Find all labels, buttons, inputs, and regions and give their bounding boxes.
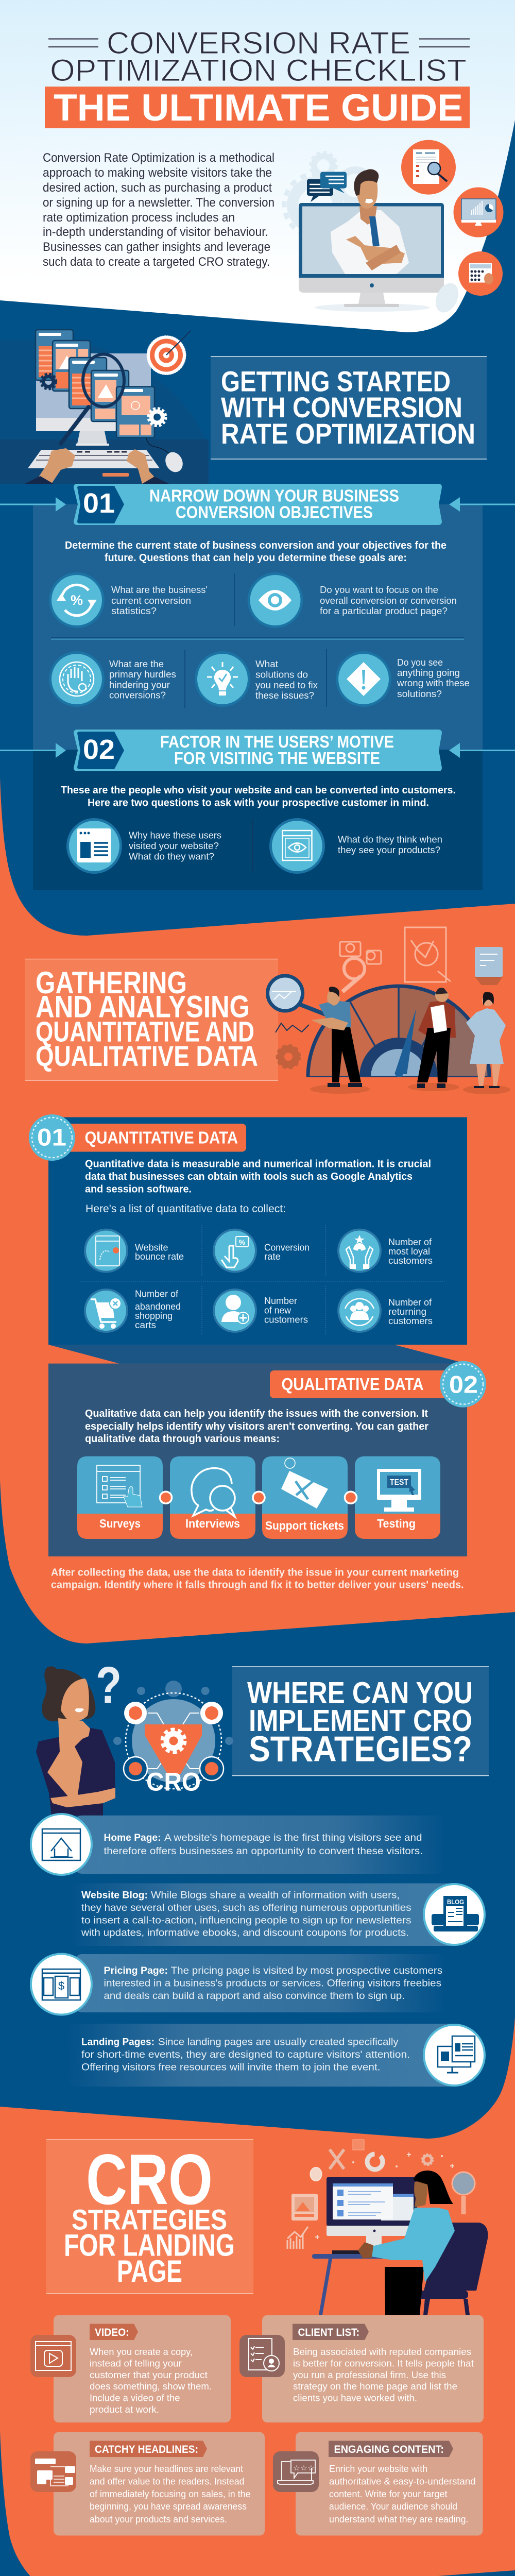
number badge: 01 — [37, 1123, 66, 1151]
CRO label: CRO — [146, 1767, 201, 1796]
question: why visited: Why have these users — [129, 830, 221, 841]
disc — [132, 1699, 215, 1783]
title line 2: OPTIMIZATION CHECKLIST — [50, 53, 467, 88]
fold connecting panels — [48, 1345, 458, 1364]
question: focus: for a particular product page? — [320, 605, 448, 616]
card: support tickets: Support tickets — [265, 1519, 344, 1532]
step 01 lead text: future. Questions that can help you determine these goals are: — [105, 552, 407, 564]
icon: home window — [42, 1829, 80, 1860]
title decorative lines — [48, 39, 470, 47]
card: interviews — [170, 1456, 255, 1539]
hero illustration: businessman in monitor — [284, 140, 504, 316]
metric: new customers — [213, 1289, 308, 1333]
card: interviews: Interviews — [185, 1517, 240, 1530]
divider — [234, 573, 235, 626]
card: engaging content: content. Write for your target — [329, 2489, 448, 2499]
banner text: THE ULTIMATE GUIDE — [54, 87, 463, 129]
panel: quantitative data: data that businesses can obtain with tools such as Google Analytics — [85, 1171, 413, 1182]
header text: WHERE CAN YOU — [247, 1676, 473, 1710]
floating icons — [310, 2140, 454, 2239]
icon: eye window — [282, 831, 312, 860]
panel: quantitative data: QUANTITATIVE DATA — [84, 1128, 238, 1147]
metric: loyal customers: most loyal — [388, 1246, 430, 1257]
question: why visited: What do they want? — [129, 851, 214, 862]
metric: loyal customers: customers — [388, 1255, 433, 1266]
card: video: When you create a copy, — [90, 2347, 193, 2357]
question: hurdles: hindering your — [109, 679, 170, 690]
header panel: where can you implement: STRATEGIES? — [249, 1728, 472, 1769]
icon: warning diamond — [347, 662, 381, 696]
panel: qualitative data — [48, 1361, 486, 1556]
card: video — [30, 2315, 231, 2422]
card: testing — [355, 1456, 440, 1539]
icon: browser page — [77, 828, 111, 862]
intro paragraph: desired action, such as purchasing a product — [43, 181, 272, 195]
question: conversion statistics: current conversion — [111, 595, 191, 606]
ribbon: step 02: FACTOR IN THE USERS’ MOTIVE — [160, 732, 394, 751]
orange band: gathering data — [0, 777, 515, 1643]
metric: abandoned carts — [84, 1289, 181, 1333]
icon: analytics monitor — [453, 188, 504, 237]
illustration: analysts and gauge — [268, 927, 510, 1094]
row: website blog: with updates, informative ebooks, and discount coupons for products. — [81, 1928, 409, 1938]
icon: review laptop — [278, 2460, 315, 2484]
card: video: product at work. — [90, 2404, 159, 2415]
card: video: Include a video of the — [90, 2393, 180, 2403]
desk — [0, 439, 209, 484]
torso — [36, 1727, 115, 1816]
question: solutions: you need to fix — [255, 680, 318, 690]
small window 4 — [91, 370, 129, 421]
speech card — [475, 947, 503, 985]
question: hurdles: primary hurdles — [109, 669, 176, 680]
card: catchy headlines — [30, 2432, 265, 2536]
row: website blog: While Blogs share a wealth of information with users, — [151, 1890, 400, 1901]
metric: returning customers: returning — [388, 1306, 426, 1317]
ribbon: step 01 — [0, 484, 515, 525]
card: video: does something, show them. — [90, 2381, 212, 2392]
icon: blog — [432, 1896, 479, 1931]
header panel: gathering and analysing: AND ANALYSING — [36, 989, 250, 1024]
horizontal divider — [51, 637, 464, 638]
card: client list: CLIENT LIST: — [298, 2327, 359, 2338]
card: testing: Testing — [377, 1517, 416, 1530]
speech bubbles — [307, 172, 347, 202]
question: what they think — [269, 818, 442, 874]
image card — [291, 2194, 318, 2221]
row: home page: Home Page: — [104, 1833, 161, 1843]
icon: pricing — [42, 1969, 80, 2000]
header panel: where can you implement: IMPLEMENT CRO — [249, 1704, 472, 1738]
analyst three — [466, 992, 506, 1088]
metric: abandoned carts: shopping — [135, 1310, 173, 1321]
monitor — [327, 2177, 417, 2252]
header text: GETTING STARTED — [221, 365, 451, 398]
card: client list — [239, 2315, 484, 2422]
magnifier — [452, 2172, 475, 2214]
question: solutions: these issues? — [255, 690, 314, 701]
question: focus: Do you want to focus on the — [320, 584, 438, 595]
person — [358, 2171, 455, 2315]
step 01 lead text — [65, 540, 447, 564]
step 01 lead text: Determine the current state of business conversion and your objectives for the — [65, 540, 447, 551]
question: hurdles: conversions? — [109, 690, 166, 701]
target — [147, 331, 191, 375]
ribbon: step 02 — [0, 730, 515, 771]
icon: light bulb — [207, 662, 238, 696]
metric: bounce rate — [84, 1229, 184, 1273]
face — [61, 1679, 89, 1721]
intro paragraph: Businesses can gather insights and leverage — [43, 240, 270, 254]
card: video: customer that your product — [90, 2370, 208, 2380]
orange heading pill — [270, 1370, 450, 1398]
closing note for data section: campaign. Identify where it falls through and fix it to better deliver your users' needs. — [51, 1580, 464, 1591]
intro paragraph: such data to create a targeted CRO strategy. — [43, 255, 270, 269]
title block — [45, 26, 470, 129]
card: catchy headlines: CATCHY HEADLINES: — [95, 2444, 198, 2455]
gauge — [307, 986, 490, 1077]
header panel: getting started — [211, 357, 487, 459]
header panel: gathering and analysing: QUALITATIVE DATA — [36, 1040, 258, 1072]
row: landing pages: Since landing pages are usually created specifically — [158, 2037, 399, 2048]
metric: new customers: Number — [264, 1295, 297, 1306]
metric: abandoned carts: abandoned — [135, 1301, 181, 1312]
illustration: woman at desk — [287, 2140, 488, 2315]
metric: returning customers — [337, 1289, 433, 1333]
card: surveys — [77, 1456, 163, 1539]
row: home page: therefore offers businesses an opportunity to convert these visitors. — [104, 1846, 423, 1857]
icon: client list — [249, 2338, 279, 2371]
panel: qualitative data: qualitative data through various means: — [85, 1433, 280, 1445]
row: home page — [31, 1814, 445, 1875]
question: what they think: What do they think when — [338, 834, 442, 845]
background gears — [284, 152, 371, 236]
pale blob — [431, 279, 463, 316]
row: home page: A website's homepage is the first thing visitors see and — [164, 1833, 422, 1843]
intro paragraph: rate optimization process includes an — [43, 211, 235, 225]
header text: GATHERING — [36, 965, 187, 1000]
question: going wrong — [336, 651, 470, 707]
card: testing: TEST — [390, 1478, 408, 1487]
description: Quantitative data is measurable and numerical information. It is crucial — [85, 1159, 431, 1170]
header panel: gathering and analysing — [25, 959, 278, 1080]
ribbon: step 02: FOR VISITING THE WEBSITE — [174, 749, 380, 768]
header panel: where can you implement — [232, 1667, 489, 1775]
intro paragraph: approach to making website visitors take the — [43, 166, 272, 180]
card: engaging content: ENGAGING CONTENT: — [334, 2444, 444, 2455]
card: video: instead of telling your — [90, 2359, 182, 2369]
row: pricing page — [31, 1954, 445, 2014]
card: surveys: Surveys — [99, 1517, 141, 1530]
card: engaging content: understand what they are reading. — [329, 2514, 469, 2524]
monitor — [36, 353, 151, 446]
metric: conversion rate: % — [239, 1238, 246, 1246]
number badge — [29, 1114, 75, 1161]
card: client list: strategy on the home page and list the — [293, 2381, 457, 2392]
icon: landing pages — [438, 2036, 475, 2073]
row: pricing page: $ — [58, 1979, 64, 1992]
analyst two — [417, 988, 456, 1088]
metric: new customers: customers — [264, 1314, 308, 1325]
hair — [42, 1666, 95, 1721]
magnifying glass — [61, 354, 124, 444]
intro paragraph: Conversion Rate Optimization is a methodical — [43, 151, 274, 165]
question: solutions: What — [255, 658, 278, 669]
metric: loyal customers — [337, 1229, 433, 1273]
header panel: CRO strategies: FOR LANDING — [64, 2228, 235, 2263]
ribbon: step 02: 02 — [83, 734, 115, 765]
icon: blog: BLOG — [447, 1898, 464, 1906]
neck and arm — [47, 1718, 90, 1798]
nodes — [124, 1702, 224, 1781]
divider — [252, 819, 253, 871]
orange title banner — [45, 87, 470, 128]
panel: step 01 body — [33, 504, 483, 750]
orange heading pill — [66, 1124, 246, 1152]
card: engaging content: audience. Your audience should — [329, 2501, 457, 2512]
question: conversion statistics: What are the business' — [111, 584, 208, 595]
card: engaging content: ☆☆☆ — [293, 2464, 315, 2472]
card: video: VIDEO: — [95, 2327, 129, 2338]
question: why visited — [66, 818, 221, 874]
row: pricing page: and deals can build a rapport and also convince them to sign up. — [104, 1991, 405, 2002]
analyst one — [312, 987, 362, 1087]
icon: percent cycle — [57, 585, 97, 616]
illustration: thinking woman — [36, 1666, 115, 1816]
ribbon: step 01: NARROW DOWN YOUR BUSINESS — [149, 486, 399, 505]
row: pricing page: The pricing page is visited by most prospective customers — [171, 1965, 442, 1976]
small window 3 — [69, 358, 107, 409]
intro paragraph — [43, 151, 274, 269]
question: going wrong: solutions? — [397, 688, 442, 699]
card: catchy headlines: Make sure your headlines are relevant — [90, 2464, 243, 2474]
card: support tickets — [262, 1456, 348, 1539]
small window 2 — [53, 341, 90, 391]
question: solutions — [195, 651, 318, 707]
closing note for data section — [51, 1567, 464, 1591]
floating icons — [340, 927, 451, 992]
ribbon: step 01: CONVERSION OBJECTIVES — [176, 503, 373, 522]
question: going wrong: anything going — [397, 667, 460, 678]
icon: video window — [36, 2342, 71, 2370]
grid dividers — [81, 1225, 446, 1335]
question: conversion statistics: statistics? — [111, 605, 157, 616]
question: going wrong: Do you see — [397, 657, 443, 668]
row: landing pages: for short-time events, they are designed to capture visitors' attention. — [81, 2049, 410, 2060]
metric: new customers: of new — [264, 1304, 291, 1315]
illustration: website windows on desktop — [0, 330, 209, 484]
row: website blog: they have several other uses, such as offering numerous opportunities — [81, 1903, 411, 1913]
card: engaging content: Enrich your website with — [329, 2464, 427, 2474]
header panel: CRO strategies: STRATEGIES — [72, 2204, 227, 2236]
row: pricing page: Pricing Page: — [104, 1965, 168, 1976]
row: website blog: Website Blog: — [81, 1890, 148, 1901]
card: catchy headlines: about your products and services. — [90, 2514, 227, 2524]
card: client list: Being associated with reputed companies — [293, 2347, 471, 2357]
row: landing pages: Offering visitors free resources will invite them to join the event. — [81, 2062, 380, 2073]
header panel: CRO strategies: PAGE — [117, 2254, 182, 2289]
small window 1 — [36, 330, 73, 380]
satellites — [113, 1681, 233, 1745]
divider — [185, 649, 327, 708]
metric: returning customers: customers — [388, 1315, 433, 1326]
row: landing pages: Landing Pages: — [81, 2037, 154, 2048]
intro paragraph: or signing up for a newsletter. The conversion — [43, 196, 274, 210]
metric: conversion rate — [213, 1229, 310, 1273]
row: pricing page: interested in a business's products or services. Offering visitors freebies — [104, 1978, 441, 1989]
connector dots — [160, 1492, 356, 1503]
card: catchy headlines: of immediately focusing on sales, in the — [90, 2489, 251, 2499]
decorative zigzag and gear — [276, 1023, 309, 1068]
growth chart — [287, 2227, 308, 2249]
icon: eye — [259, 590, 291, 611]
gears — [41, 374, 166, 426]
header panel: CRO strategies — [46, 2140, 253, 2294]
list intro: Here's a list of quantitative data to collect: — [85, 1203, 286, 1215]
panel: qualitative data: QUALITATIVE DATA — [281, 1375, 423, 1394]
panel: step 02 body — [33, 750, 483, 890]
card: catchy headlines: and offer value to the readers. Instead — [90, 2477, 244, 2487]
panel: qualitative data: especially helps identify why visitors aren't converting. You can gather — [85, 1421, 428, 1432]
header text: CRO — [86, 2140, 213, 2219]
question: conversion statistics — [49, 572, 208, 628]
question: going wrong: wrong with these — [397, 677, 470, 688]
description: Qualitative data can help you identify the issues with the conversion. It — [85, 1408, 428, 1419]
chair — [402, 2223, 488, 2315]
chart magnifier — [268, 976, 335, 1018]
icon: calculator — [458, 251, 503, 296]
card: client list: is better for conversion. It tells people that — [293, 2359, 474, 2369]
intro paragraph: in-depth understanding of visitor behaviour. — [43, 225, 268, 239]
panel: quantitative data: and session software. — [85, 1184, 192, 1195]
metric: abandoned carts: carts — [135, 1319, 156, 1330]
question: what they think: they see your products? — [338, 844, 440, 855]
icon: percent cycle: % — [71, 592, 83, 608]
panel: quantitative data — [29, 1114, 467, 1345]
header panel: getting started: WITH CONVERSION — [221, 391, 462, 423]
keyboard — [28, 450, 160, 468]
backdrop blob — [0, 340, 209, 484]
title line 1: CONVERSION RATE — [107, 26, 410, 60]
mouse and pen — [102, 438, 186, 477]
businessman — [331, 169, 409, 274]
ground shadows — [310, 1083, 510, 1094]
hero sky shape — [0, 0, 515, 332]
metric: returning customers: Number of — [388, 1297, 432, 1308]
CRO funnel graphic — [113, 1681, 233, 1796]
question: hurdles: What are the — [109, 658, 164, 669]
metric: abandoned carts: Number of — [135, 1289, 179, 1299]
number badge: 02 — [449, 1371, 478, 1398]
metric: conversion rate: Conversion — [264, 1242, 310, 1253]
icon: stop hand — [60, 662, 94, 696]
icon: checklist and magnifier — [401, 140, 456, 195]
dashed ring — [126, 1693, 221, 1789]
question: why visited: visited your website? — [129, 840, 219, 851]
step 02 lead text — [61, 785, 456, 809]
header panel: gathering and analysing: QUANTITATIVE AND — [36, 1015, 254, 1047]
card: catchy headlines: beginning, you have spread awareness — [90, 2501, 247, 2512]
row: website blog — [71, 1884, 485, 1946]
question mark: ? — [96, 1656, 122, 1714]
card: client list: clients you have worked with. — [293, 2393, 417, 2403]
row: landing pages — [67, 2024, 485, 2087]
question: focus: overall conversion or conversion — [320, 595, 457, 606]
orange band: landing page strategies — [0, 2017, 515, 2576]
step 02 lead text: Here are two questions to ask with your prospective customer in mind. — [88, 798, 429, 809]
metric: bounce rate: Website — [135, 1242, 168, 1253]
ribbon: step 01: 01 — [83, 488, 115, 519]
header panel: getting started: RATE OPTIMIZATION — [221, 417, 475, 450]
number badge — [440, 1361, 486, 1408]
question: hurdles — [49, 651, 176, 707]
metric: conversion rate: rate — [264, 1251, 281, 1262]
icon: headlines — [35, 2459, 75, 2485]
closing note for data section: After collecting the data, use the data to identify the issue in your current marketing — [51, 1567, 459, 1578]
hands — [25, 448, 169, 484]
step 02 lead text: These are the people who visit your website and can be converted into customers. — [61, 785, 456, 796]
node links — [148, 1713, 199, 1769]
desk — [312, 2250, 424, 2315]
metric: loyal customers: Number of — [388, 1236, 432, 1247]
card: engaging content — [273, 2432, 483, 2536]
gear — [162, 1730, 185, 1752]
funnel — [145, 1724, 202, 1774]
metric: bounce rate: bounce rate — [135, 1251, 184, 1262]
question: solutions: solutions do — [255, 669, 308, 680]
card: client list: you run a professional firm. Use this — [293, 2370, 446, 2380]
monitor — [299, 203, 444, 312]
card: engaging content: authoritative & easy-to-understand — [329, 2477, 476, 2487]
row: website blog: to insert a call-to-action, influencing people to sign up for newsletters — [81, 1915, 411, 1926]
small window 5 — [116, 386, 154, 438]
question: focus — [247, 572, 457, 628]
